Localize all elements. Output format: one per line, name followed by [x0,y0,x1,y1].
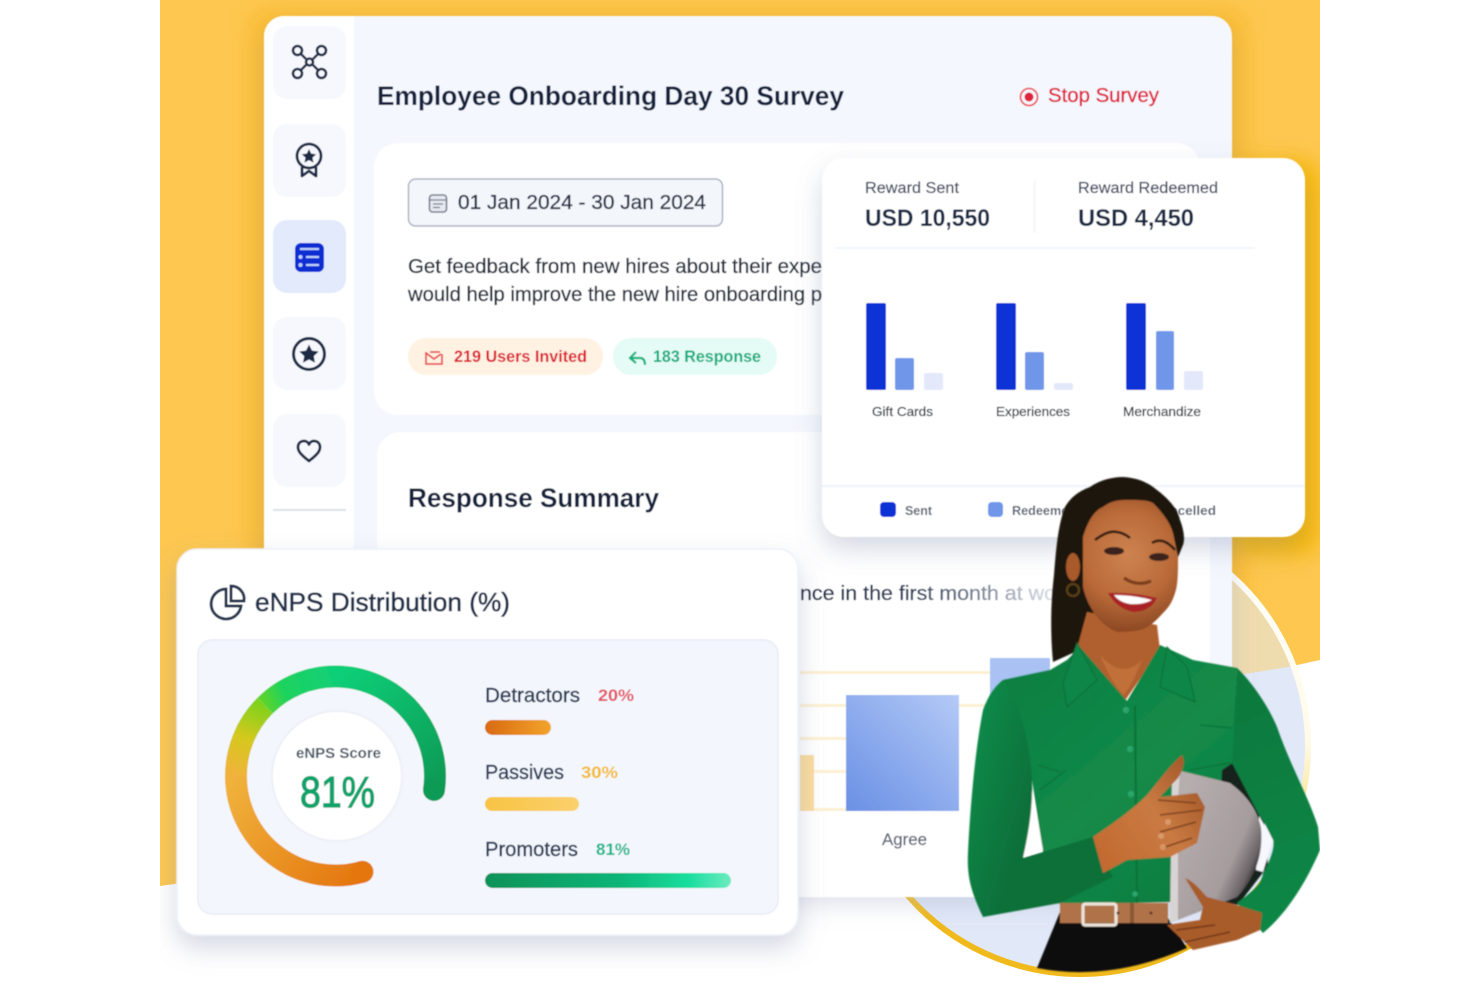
metric: detractors: 20% [598,686,634,705]
panel: sidebar [264,16,354,548]
badge: users invited: 219 Users Invited [454,347,587,366]
heading: survey title: Employee Onboarding Day 30 Survey [377,81,844,111]
nose [1124,578,1151,583]
metric: passives: Passives [485,762,564,784]
belt [1060,903,1168,925]
reward redeemed stat: USD 4,450 [1078,205,1194,232]
survey description: Get feedback from new hires about their expe [408,256,822,278]
gap between arm and laptop [1256,816,1273,872]
lower hand [1167,878,1262,950]
background: deeper yellow glow around cards [242,2,1320,594]
sidebar tile: survey list active [273,220,346,293]
icon: heart [298,441,320,461]
inner panel [198,640,778,914]
icon: network [293,46,326,78]
icon: award ribbon [297,144,321,176]
bars: merchandize: Merchandize [1123,405,1201,419]
bar chart: rewards [866,303,1203,419]
gauge centre [272,711,402,841]
eyebrows [1095,532,1175,550]
survey question: nce in the first month at wo [800,583,1056,605]
badge: users invited [408,338,603,375]
reward sent stat: USD 10,550 [865,205,990,232]
left sleeve [968,680,1113,917]
panel: reward card [822,158,1305,537]
shadow behind laptop [1215,762,1268,905]
metric: passives: 30% [581,763,618,782]
chart legend: Sent [905,504,933,518]
neck highlight [1100,655,1142,695]
backdrop circle behind the person [904,572,1311,977]
bars: merchandize [1123,303,1203,419]
background: yellow panel [160,0,1320,900]
reward redeemed stat: Reward Redeemed [1078,180,1218,197]
bar chart: response summary [800,658,1050,849]
panel: response summary [377,432,1210,897]
sidebar tile: star [273,317,346,390]
ear and earring [1066,553,1080,596]
sidebar tile: award [273,124,346,197]
bars: experiences: Experiences [996,405,1070,419]
metric: detractors [485,685,634,735]
icon: stop [1020,88,1038,106]
metric: promoters: Promoters [485,839,578,861]
panel: survey details [374,143,1200,415]
badge: responses: 183 Response [653,347,761,366]
reward redeemed stat [1078,180,1218,232]
metric: passives [485,762,618,811]
upper hand [1093,755,1205,873]
neck [1078,612,1160,702]
background: white hill [160,660,1320,900]
icon: pie chart [211,586,244,619]
chart legend: Cancelled [1152,504,1216,518]
icon: calendar [430,195,446,212]
right sleeve [1232,668,1320,933]
chart legend: Redeemed [1012,504,1076,518]
panel: eNPS distribution [177,549,798,935]
heading: response summary: Response Summary [408,483,659,513]
shirt folds [1038,725,1232,790]
sidebar tile: network [273,26,346,99]
heading: eNPS distribution: eNPS Distribution (%) [255,587,510,617]
metric: detractors: Detractors [485,685,580,707]
reward sent stat: Reward Sent [865,180,960,197]
stop survey action: Stop Survey [1048,85,1159,107]
person holding a laptop [968,477,1320,972]
survey description: would help improve the new hire onboarding p [407,284,822,306]
bars: gift cards: Gift Cards [872,405,933,419]
bars: experiences [996,303,1073,419]
face [1083,500,1178,632]
panel shadow [264,16,1232,897]
icon: star badge [294,338,324,370]
collar [1063,643,1195,707]
icon: list [295,243,324,272]
icon: mail [426,352,442,364]
smile [1108,593,1157,612]
gauge: eNPS score: eNPS Score [296,745,381,762]
date range pill: 01 Jan 2024 - 30 Jan 2024 [458,192,706,214]
gauge: eNPS score [236,676,445,883]
reward sent stat [865,180,990,232]
placket and buttons [1123,706,1138,903]
badge: responses [613,338,777,375]
chart legend [880,502,1216,518]
bars: gift cards [866,303,943,419]
eyes [1104,547,1169,561]
gap between arm and torso [1023,790,1043,857]
date range pill [408,179,722,226]
laptop [1170,769,1261,923]
icon: reply [630,352,645,365]
metric: promoters: 81% [596,840,630,859]
survey description [407,256,822,306]
shirt torso [1003,645,1240,905]
ponytail and hair [1051,477,1184,662]
panel: main dashboard window [264,16,1232,897]
metric: promoters [485,839,731,888]
gauge: eNPS score: 81% [300,768,375,817]
sidebar tile: heart [273,414,346,487]
pants [1037,912,1187,972]
bar chart: response summary: Agree [882,830,927,849]
